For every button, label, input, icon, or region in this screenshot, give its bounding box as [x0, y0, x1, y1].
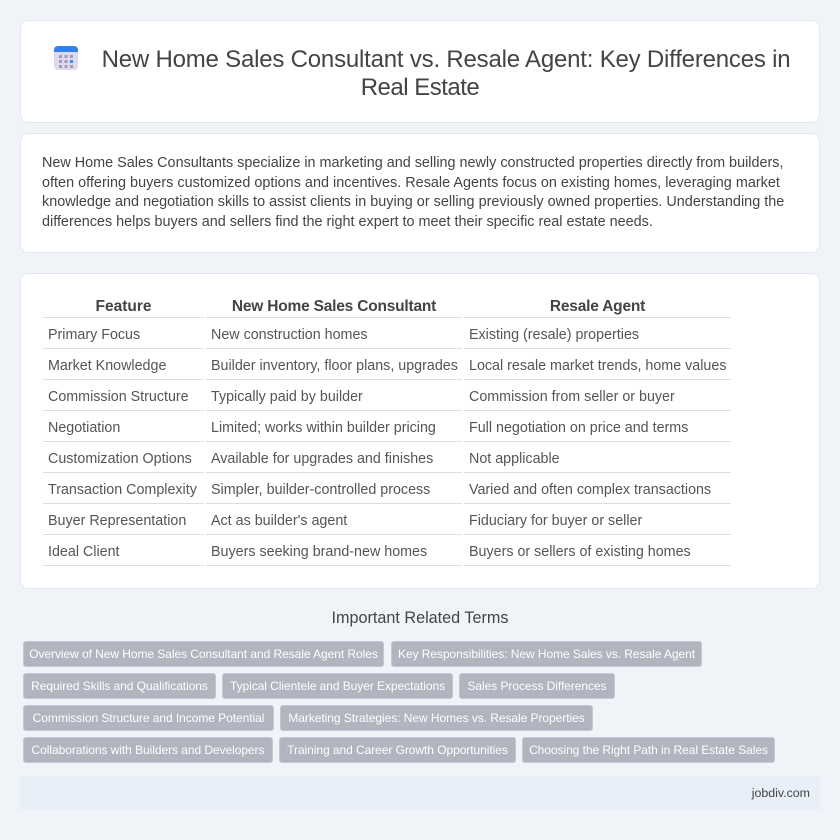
tag — [23, 673, 216, 699]
row: ideal client: Buyers or sellers of existing homes — [469, 544, 691, 560]
intro text: New Home Sales Consultants specialize in marketing and selling newly constructed properties directly from builders, — [42, 155, 783, 171]
table header: Resale Agent — [550, 298, 645, 315]
tag — [459, 673, 615, 699]
tag — [391, 641, 702, 667]
tag — [279, 737, 516, 763]
row: buyer representation — [48, 513, 642, 529]
row: commission structure: Commission Structure — [48, 389, 189, 405]
tag: Collaborations with Builders and Developers — [32, 743, 264, 757]
title: Real Estate — [361, 74, 479, 101]
tag — [280, 705, 593, 731]
tag: Typical Clientele and Buyer Expectations — [230, 679, 445, 693]
row: commission structure: Typically paid by builder — [211, 389, 363, 405]
row: ideal client: Ideal Client — [48, 544, 120, 560]
row: primary focus: Primary Focus — [48, 327, 140, 343]
row: commission structure: Commission from seller or buyer — [469, 389, 675, 405]
footer bar — [20, 776, 820, 810]
row: transaction complexity — [48, 482, 711, 498]
row: market knowledge: Builder inventory, floor plans, upgrades — [211, 358, 458, 374]
row: market knowledge: Market Knowledge — [48, 358, 166, 374]
title: New Home Sales Consultant vs. Resale Agent: Key Differences in — [102, 46, 790, 73]
table header: New Home Sales Consultant — [232, 298, 436, 315]
intro text: knowledge and negotiation skills to assist clients in buying or selling previously owned properties. Understanding the — [42, 194, 784, 210]
row: negotiation: Negotiation — [48, 420, 120, 436]
row: customization options: Customization Options — [48, 451, 192, 467]
tag — [222, 673, 453, 699]
title — [102, 46, 790, 101]
intro text: differences helps buyers and sellers find the right expert to meet their specific real estate needs. — [42, 214, 653, 230]
tag: Training and Career Growth Opportunities — [287, 743, 508, 757]
row: transaction complexity: Simpler, builder-controlled process — [211, 482, 430, 498]
row: buyer representation: Buyer Representation — [48, 513, 186, 529]
row: primary focus: New construction homes — [211, 327, 368, 343]
tag: Required Skills and Qualifications — [31, 679, 208, 693]
row: buyer representation: Fiduciary for buyer or seller — [469, 513, 642, 529]
row: negotiation: Full negotiation on price and terms — [469, 420, 688, 436]
row: transaction complexity: Transaction Complexity — [48, 482, 197, 498]
tag: Sales Process Differences — [467, 679, 606, 693]
table header — [96, 298, 646, 315]
row: negotiation — [48, 420, 688, 436]
tag: Key Responsibilities: New Home Sales vs. Resale Agent — [398, 647, 695, 661]
row: buyer representation: Act as builder's agent — [211, 513, 347, 529]
row: customization options: Available for upgrades and finishes — [211, 451, 433, 467]
row: customization options — [48, 451, 560, 467]
icon: calendar — [54, 46, 78, 70]
tag: Commission Structure and Income Potential — [33, 711, 264, 725]
tag — [522, 737, 775, 763]
row: primary focus: Existing (resale) properties — [469, 327, 639, 343]
panel: introduction — [20, 133, 820, 253]
tag — [23, 737, 273, 763]
table header: Feature — [96, 298, 152, 315]
tag: Choosing the Right Path in Real Estate Sales — [529, 743, 768, 757]
intro text: often offering buyers customized options and incentives. Resale Agents focus on existing homes, leveraging market — [42, 175, 780, 191]
tag — [23, 705, 274, 731]
tag: Marketing Strategies: New Homes vs. Resale Properties — [288, 711, 585, 725]
row: ideal client: Buyers seeking brand-new homes — [211, 544, 427, 560]
tag: Overview of New Home Sales Consultant and Resale Agent Roles — [29, 647, 378, 661]
row: market knowledge: Local resale market trends, home values — [469, 358, 726, 374]
related terms heading: Important Related Terms — [332, 609, 508, 627]
row: commission structure — [48, 389, 675, 405]
tag — [23, 641, 384, 667]
row: negotiation: Limited; works within builder pricing — [211, 420, 436, 436]
panel: comparison table — [20, 273, 820, 589]
row: ideal client — [48, 544, 691, 560]
row: market knowledge — [48, 358, 726, 374]
footer source: jobdiv.com — [752, 786, 810, 800]
row: customization options: Not applicable — [469, 451, 560, 467]
intro text — [42, 155, 784, 230]
row: primary focus — [48, 327, 639, 343]
header panel — [20, 20, 820, 123]
row: transaction complexity: Varied and often complex transactions — [469, 482, 711, 498]
